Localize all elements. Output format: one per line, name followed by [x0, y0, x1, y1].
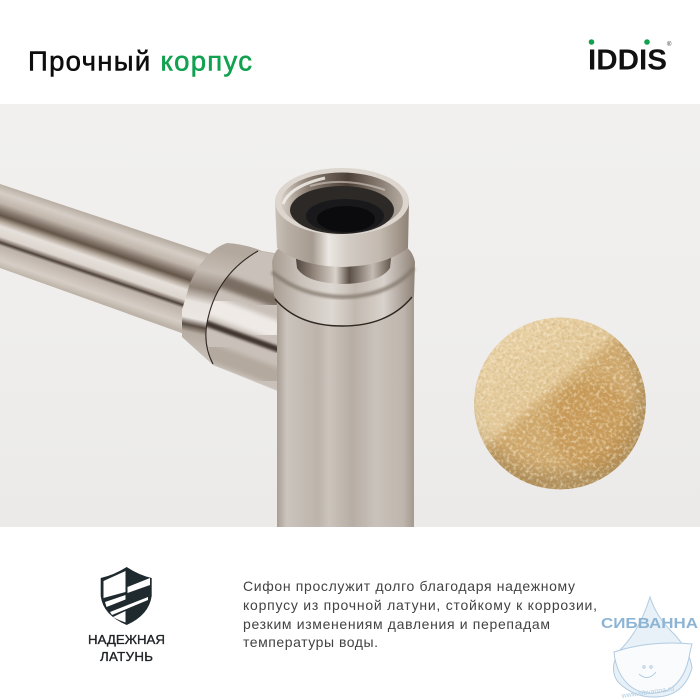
icon label: НАДЕЖНАЯ: [88, 632, 165, 647]
icon label: ЛАТУНЬ: [100, 649, 153, 664]
neck: [296, 258, 392, 284]
elbow collar: [182, 243, 277, 391]
title: Прочный корпус: [28, 46, 252, 76]
description text: резким изменениям давления и перепадам: [243, 616, 550, 632]
icon label: [88, 632, 165, 664]
elbow shading: [206, 251, 277, 381]
watermark tub: [614, 643, 692, 693]
description text: [243, 578, 597, 650]
watermark face: [639, 666, 656, 678]
description text: Сифон прослужит долго благодаря надежному: [243, 578, 575, 594]
logo dot left: [589, 39, 594, 45]
watermark url: www.sibvanna.ru: [620, 686, 675, 700]
brass sphere: [474, 317, 646, 490]
logo: iddis: IDDIS: [588, 44, 667, 76]
vertical body: [277, 285, 414, 535]
horizontal pipe: [0, 184, 210, 336]
logo registered mark: ®: [667, 41, 672, 48]
cap opening rim: [275, 168, 409, 235]
photo panel: [0, 104, 700, 535]
top ring: [272, 243, 415, 326]
watermark: sibvanna: [601, 597, 699, 700]
photo background: [0, 104, 700, 527]
watermark drop: [613, 597, 692, 697]
description text: корпусу из прочной латуни, стойкому к коррозии,: [243, 597, 597, 613]
cap dark interior: [290, 186, 394, 234]
icon: shield: [101, 567, 152, 625]
logo dot right: [644, 39, 650, 45]
description text: температуры воды.: [243, 634, 378, 650]
watermark name: СИБВАННА: [601, 616, 699, 632]
threaded cap: [275, 168, 409, 267]
